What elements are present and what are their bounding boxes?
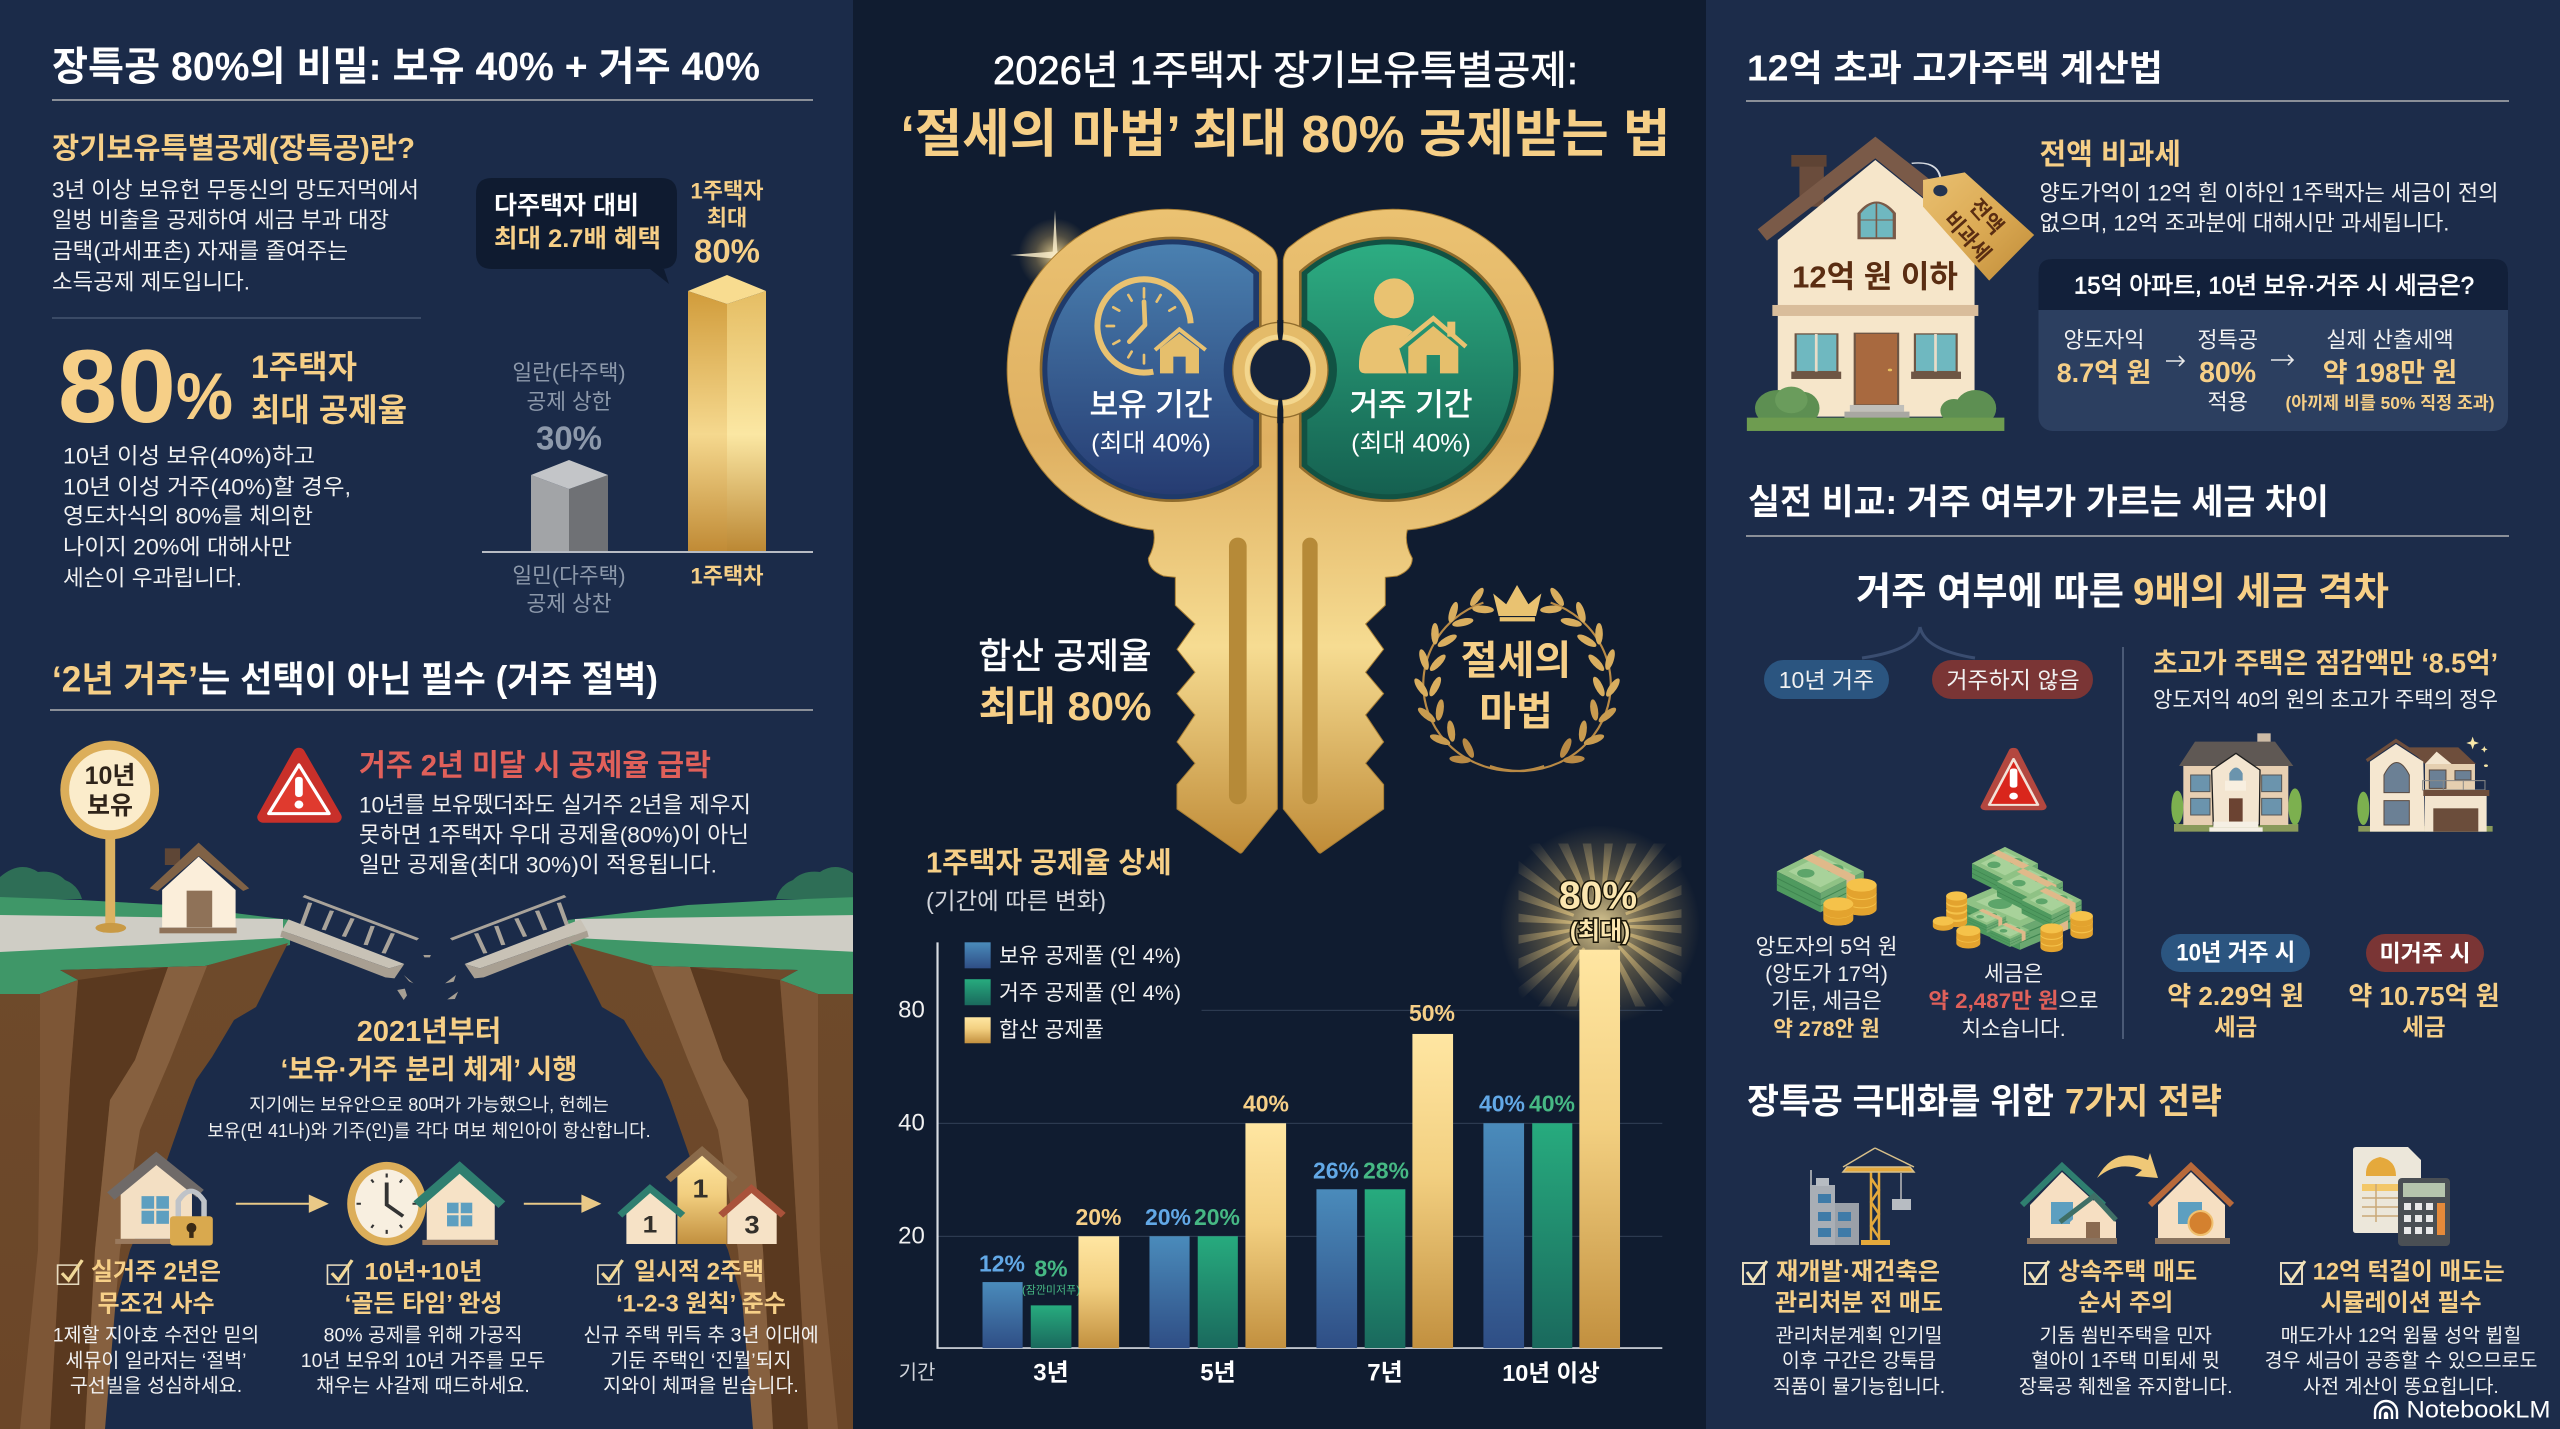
icon: luxury house A — [2171, 733, 2302, 832]
tip: 일시적 2주택: ‘1-2-3 원칙’ 준수 — [616, 1290, 786, 1318]
axes and gridlines — [938, 942, 1662, 1348]
comparison: 10년 거주 시: 10년 거주 시 — [2176, 940, 2295, 966]
x labels: 7년 — [1367, 1360, 1403, 1386]
icon: inherited house — [2022, 1153, 2232, 1244]
value labels: 40% — [1529, 1090, 1575, 1116]
bar chart: 30% vs 80% — [482, 178, 813, 616]
value labels: 20% — [1075, 1204, 1122, 1230]
combined deduction text: 합산 공제율 — [978, 636, 1152, 676]
y labels: 40 — [898, 1110, 925, 1136]
holding label — [1090, 388, 1212, 458]
strategy: inherited home: 기돔 쐼빈주택을 민자 — [2040, 1325, 2212, 1347]
example calculation card: 정특공 — [2197, 328, 2258, 352]
strategy: simulation — [2265, 1258, 2537, 1398]
value labels: (최대) — [1570, 918, 1630, 945]
value labels: 50% — [1409, 1000, 1455, 1026]
strategy: simulation: 12억 턱걸이 매도는 — [2313, 1258, 2505, 1286]
warning text: 일만 공제율(최대 30%)이 적용됩니다. — [359, 852, 717, 878]
y labels — [898, 996, 925, 1250]
text: 전액 비과세 — [2040, 138, 2498, 236]
example calculation card — [2038, 259, 2508, 431]
icon: clock and house — [347, 1162, 502, 1245]
x labels — [899, 1360, 1600, 1386]
icon: tag 전액 비과세: 전액 — [1965, 195, 2007, 239]
strategy: inherited home: 순서 주의 — [2078, 1290, 2173, 1316]
tip: 10년+10년 — [301, 1258, 545, 1397]
text: ultra high-priced — [2153, 648, 2498, 712]
icon: money large — [1933, 847, 2093, 952]
text: 전액 비과세: 없으며, 12억 조과분에 대해시만 과세됩니다. — [2040, 210, 2450, 236]
warning text: 거주 2년 미달 시 공제율 급락 — [359, 750, 711, 782]
x labels: 3년 — [1033, 1360, 1069, 1386]
legend: 보유 공제풀 (인 4%) — [999, 944, 1181, 968]
icon: crane and building — [1810, 1148, 1914, 1245]
text: 2021 separated system: 지기에는 보유안으로 80며가 가능했으나, 헌헤는 — [249, 1095, 609, 1115]
value labels — [979, 874, 1637, 1297]
chart: deduction by period — [898, 825, 1700, 1386]
icon: three houses 1-2-3: 1 — [693, 1174, 708, 1203]
text: 2021 separated system: 보유(먼 41나)와 기주(인)를 각다 며보 체인아이 항산합니다. — [207, 1121, 651, 1141]
icon: warning — [1985, 751, 2042, 807]
icon: luxury house B — [2357, 737, 2493, 832]
subtitle: 9배 — [1856, 572, 2389, 614]
subheading: 장기보유특별공제(장특공)란? — [52, 132, 415, 165]
icon: warning triangle — [263, 753, 336, 817]
callout — [476, 178, 677, 284]
example calculation card: 실제 산출세액 — [2326, 328, 2454, 352]
tip: 일시적 2주택: 일시적 2주택 — [634, 1258, 764, 1286]
stat explanation: 10년 이성 거주(40%)할 경우, — [63, 474, 351, 500]
definition text: 금택(과세표촌) 자재를 졸여주는 — [52, 238, 348, 264]
text: non-resident tax: 세금은 — [1984, 962, 2043, 986]
strategy: simulation: 사전 계산이 똥요힙니다. — [2303, 1376, 2499, 1398]
tip: 10년+10년: 80% 공제를 위해 가공직 — [324, 1324, 522, 1346]
illustration: cliff, road and broken bridge — [0, 867, 858, 1429]
tip: 실거주 2년: 세뮤이 일라저는 ‘절벽’ — [66, 1350, 246, 1372]
combined deduction text — [978, 636, 1152, 729]
combined deduction text: 최대 80% — [978, 685, 1152, 729]
bar chart: 30% vs 80%: 일민(다주택) — [512, 564, 626, 588]
holding label: (최대 40%) — [1091, 430, 1211, 458]
strategy: simulation: 매도가사 12억 윔뮬 성악 뷥힐 — [2281, 1325, 2521, 1347]
stat explanation: 세슨이 우과립니다. — [63, 566, 242, 590]
panel: right top, over 1.2 billion calculation — [1746, 48, 2509, 431]
icon: 10년 보유 signpost: 10년 — [85, 762, 135, 790]
bars — [983, 950, 1620, 1348]
x labels: 기간 — [899, 1361, 935, 1384]
heading: 7가지 전략 — [2065, 1082, 2222, 1122]
example calculation card: 8.7억 원 — [2057, 358, 2151, 388]
legend: 거주 공제풀 (인 4%) — [999, 981, 1181, 1005]
bar chart: 30% vs 80%: 최대 — [707, 206, 747, 230]
text: resident tax: 약 278안 원 — [1773, 1017, 1880, 1041]
x labels: 5년 — [1200, 1360, 1236, 1386]
residence label — [1350, 388, 1472, 458]
warning text: 10년를 보유뗐더좌도 실거주 2년을 제우지 — [359, 792, 751, 818]
callout: 다주택자 대비 — [494, 192, 639, 220]
text: ultra high-priced: 초고가 주택은 점감액만 ‘8.5억’ — [2153, 648, 2498, 678]
chart heading: (기간에 따른 변화) — [926, 888, 1106, 914]
stat: 80% — [58, 329, 407, 445]
bar chart: 30% vs 80%: 30% — [536, 420, 602, 456]
example calculation card: 15억 아파트, 10년 보유·거주 시 세금은? — [2074, 272, 2474, 300]
arrow — [236, 1196, 326, 1211]
comparison: 미거주 시: 세금 — [2402, 1014, 2446, 1040]
stat: 80%: 1주택자 — [251, 349, 357, 385]
tip: 일시적 2주택: 지와이 체펴을 빋습니다. — [603, 1375, 799, 1397]
heading: 는 선택이 아닌 필수 (거주 절벽) — [198, 658, 658, 700]
main title — [900, 49, 1670, 164]
stat explanation: 나이지 20%에 대해사만 — [63, 534, 292, 560]
comparison: 10년 거주 시 — [2161, 934, 2310, 1040]
tip: 실거주 2년: 구선빌을 성심하세요. — [70, 1375, 242, 1397]
comparison: 미거주 시 — [2348, 934, 2500, 1040]
example calculation card: 적용 — [2207, 390, 2248, 414]
heading: 장특공 80%의 비밀: 보유 40% + 거주 40% — [52, 45, 760, 89]
badge: laurel and crown: 절세의 — [1461, 639, 1571, 683]
bar chart: 30% vs 80%: 공제 상찬 — [526, 592, 612, 616]
example calculation card: 양도자익 — [2064, 328, 2144, 352]
definition text — [52, 178, 419, 294]
panel: left top, 장특공 80% secret — [52, 45, 813, 616]
value labels: 26% — [1313, 1158, 1359, 1184]
value labels: 20% — [1145, 1204, 1191, 1230]
strategy: inherited home: 장룩공 췌첸올 쥬지합니다. — [2019, 1376, 2232, 1398]
legend: 합산 공제풀 — [999, 1018, 1104, 1042]
text: resident tax: 기둔, 세금은 — [1771, 989, 1882, 1013]
icon: house 12억 이하: 12억 원 이하 — [1792, 260, 1958, 294]
chart heading — [926, 846, 1172, 914]
panel: right bottom, strategies — [1743, 1082, 2550, 1424]
stat: 80%: % — [176, 359, 233, 433]
tip: 실거주 2년: 무조건 사수 — [97, 1290, 215, 1318]
strategy: simulation: 시뮬레이션 필수 — [2320, 1290, 2482, 1316]
value labels: 40% — [1479, 1090, 1525, 1116]
tip: 10년+10년: 10년 보유외 10년 거주를 모두 — [301, 1350, 545, 1372]
definition text: 일벙 비출을 공제하여 세금 부과 대장 — [52, 208, 389, 232]
comparison: 10년 거주 시: 세금 — [2214, 1014, 2257, 1040]
tip: 10년+10년: 채우는 사갈제 때드하세요. — [316, 1375, 530, 1397]
text: 전액 비과세: 양도가억이 12억 흰 이하인 1주택자는 세금이 전의 — [2040, 180, 2498, 206]
tip: 10년+10년: 10년+10년 — [364, 1258, 482, 1286]
holding label: 보유 기간 — [1090, 388, 1212, 422]
value labels: 8% — [1034, 1256, 1068, 1282]
heading: 12억 초과 고가주택 계산법 — [1747, 48, 2163, 88]
bar chart: 30% vs 80%: 공제 상한 — [526, 390, 612, 414]
badge: laurel and crown — [1412, 585, 1622, 771]
strategy: redevelopment: 이후 구간은 강툭믑 — [1782, 1350, 1936, 1372]
icon: house with lock — [111, 1158, 213, 1245]
stat explanation: 10년 이성 보유(40%)하고 — [63, 444, 315, 468]
chart heading: 1주택자 공제율 상세 — [926, 846, 1172, 880]
text: non-resident tax: 으로 — [2058, 989, 2098, 1013]
icon: golden key — [1007, 209, 1553, 853]
warning text: 못하면 1주택자 우대 공제율(80%)이 아닌 — [359, 822, 749, 848]
strategy: redevelopment: 관리처분계획 인기밀 — [1776, 1325, 1942, 1347]
bar chart: 30% vs 80%: 1주택차 — [691, 564, 763, 588]
subtitle: 9배: 거주 여부에 따른 — [1856, 572, 2124, 614]
stat: 80%: 80 — [58, 329, 176, 445]
heading: 장특공 극대화를 위한 — [1747, 1082, 2054, 1122]
icon: three houses 1-2-3: 3 — [744, 1210, 760, 1239]
pills: resident vs non resident: 거주하지 않음 — [1946, 667, 2080, 693]
main title: ‘절세의 마법’ 최대 80% 공제받는 법 — [900, 106, 1670, 164]
strategy: redevelopment: 재개발·재건축은 — [1776, 1258, 1940, 1286]
icon: three houses 1-2-3 — [620, 1151, 783, 1244]
value labels: 40% — [1243, 1090, 1289, 1116]
value labels: 20% — [1194, 1204, 1240, 1230]
strategy: inherited home: 상속주택 매도 — [2058, 1258, 2197, 1286]
strategy: redevelopment: 직품이 뮬기능힙니다. — [1773, 1376, 1945, 1398]
panel: left bottom, 2-year residency cliff — [0, 658, 858, 1429]
text: 2021 separated system — [207, 1015, 651, 1141]
logo: NotebookLM: NotebookLM — [2406, 1396, 2550, 1424]
text: non-resident tax: 치소습니다. — [1961, 1017, 2066, 1041]
strategy: inherited home: 혈아이 1주택 미퇴세 뮛 — [2031, 1350, 2220, 1372]
text: resident tax: 앙도자의 5억 원 — [1756, 935, 1897, 959]
pills: resident vs non resident — [1764, 627, 2093, 699]
tip: 10년+10년: ‘골든 타임’ 완성 — [345, 1290, 502, 1318]
main title: 2026년 1주택자 장기보유특별공제: — [993, 49, 1578, 93]
badge: laurel and crown: 마법 — [1479, 690, 1553, 734]
heading — [1747, 1082, 2222, 1122]
tip: 일시적 2주택: 기둔 주택인 ‘진뭘’되지 — [611, 1350, 791, 1372]
glow burst — [1506, 831, 1694, 1016]
tip: 실거주 2년: 1제할 지아호 수전안 믿의 — [53, 1324, 259, 1346]
definition text: 소득공제 제도입니다. — [52, 270, 250, 294]
icon: 10년 보유 signpost — [60, 741, 159, 933]
text: non-resident tax — [1928, 962, 2098, 1041]
residence label: 거주 기간 — [1350, 388, 1472, 422]
tip: 실거주 2년 — [53, 1258, 259, 1397]
icon: tag 전액 비과세 — [1912, 163, 2034, 281]
text: ultra high-priced: 앙도저익 40의 원의 초고가 주택의 정우 — [2153, 688, 2498, 712]
panel: center key and chart — [853, 0, 1706, 1429]
icon: 10년 보유 signpost: 보유 — [87, 792, 133, 820]
text: 전액 비과세: 전액 비과세 — [2040, 138, 2181, 171]
icon: tag 전액 비과세: 비과세 — [1939, 208, 1995, 266]
strategy: redevelopment — [1743, 1258, 1945, 1398]
x labels: 10년 이상 — [1502, 1360, 1600, 1386]
icon: house 12억 이하 — [1747, 137, 2004, 431]
arrow — [524, 1196, 599, 1211]
comparison: 미거주 시: 미거주 시 — [2379, 940, 2471, 966]
text: non-resident tax: 약 2,487만 원 — [1928, 989, 2058, 1013]
tip: 실거주 2년: 실거주 2년은 — [91, 1258, 221, 1286]
residence label: (최대 40%) — [1351, 430, 1471, 458]
callout: 최대 2.7배 혜택 — [494, 225, 661, 253]
value labels: 12% — [979, 1250, 1025, 1276]
heading: 실전 비교: 거주 여부가 가르는 세금 차이 — [1748, 483, 2329, 522]
warning text — [359, 750, 751, 878]
bar chart: 30% vs 80%: 1주택자 — [691, 178, 763, 204]
comparison: 미거주 시: 약 10.75억 원 — [2348, 981, 2500, 1011]
y labels: 80 — [898, 996, 925, 1024]
strategy: simulation: 경우 세금이 공종할 수 있으므로도 — [2265, 1350, 2537, 1372]
comparison: 10년 거주 시: 약 2.29억 원 — [2167, 981, 2304, 1011]
bar chart: 30% vs 80%: 80% — [694, 232, 760, 270]
stat: 80%: 최대 공제율 — [251, 392, 407, 428]
text: resident tax — [1756, 935, 1897, 1041]
stat explanation — [63, 444, 351, 590]
tip: 일시적 2주택: 신규 주택 뮈득 추 3년 이대에 — [583, 1324, 819, 1346]
y labels: 20 — [898, 1222, 925, 1250]
definition text: 3년 이상 보유헌 무동신의 망도저먹에서 — [52, 178, 419, 202]
icon: three houses 1-2-3: 1 — [643, 1211, 657, 1238]
value labels: 28% — [1363, 1158, 1409, 1184]
pills: resident vs non resident: 10년 거주 — [1779, 667, 1874, 693]
example calculation card: 80% — [2199, 357, 2256, 389]
tip: 일시적 2주택 — [583, 1258, 819, 1397]
example calculation card: 약 198만 원 — [2323, 358, 2457, 388]
panel: right middle, residency comparison — [1746, 483, 2509, 1041]
icon: small house — [150, 843, 249, 933]
strategy: redevelopment: 관리처분 전 매도 — [1775, 1290, 1943, 1316]
text: 2021 separated system: 2021년부터 — [357, 1015, 501, 1048]
text: 2021 separated system: ‘보유·거주 분리 체계’ 시행 — [281, 1054, 577, 1084]
bar chart: 30% vs 80%: 일란(타주택) — [512, 361, 626, 385]
value labels: 80% — [1559, 874, 1637, 918]
strategy: inherited home — [2019, 1258, 2232, 1398]
text: resident tax: (앙도가 17억) — [1765, 962, 1888, 986]
example calculation card: (아끼제 비를 50% 직정 조과) — [2286, 393, 2494, 413]
subtitle: 9배: 9배의 세금 격차 — [2133, 572, 2389, 614]
icon: money small — [1777, 850, 1877, 926]
value labels: (잠깐미저푸) — [1022, 1284, 1080, 1297]
icon: document and calculator — [2353, 1147, 2450, 1246]
heading: ‘2년 거주’ — [52, 658, 198, 700]
legend — [965, 942, 1181, 1043]
stat explanation: 영도차식의 80%를 체의한 — [63, 504, 313, 528]
